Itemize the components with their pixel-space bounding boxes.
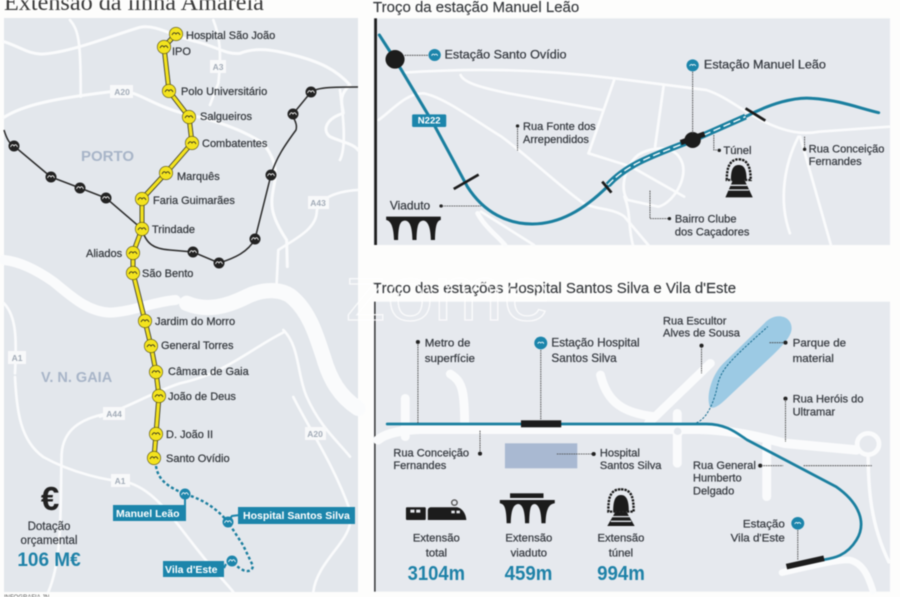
road tags: A20 (114, 87, 130, 97)
stat: viaduct length: viaduto (511, 548, 547, 560)
label: Hospital Santos Silva (557, 447, 662, 472)
label: Rua Conceição Fernandes: Rua Conceição (809, 143, 884, 155)
extension dotted line (156, 466, 253, 571)
label: Estação Vila d'Este (731, 517, 804, 560)
label: Rua Heróis do Ultramar (783, 393, 863, 442)
label: Rua Conceição Fernandes: Fernandes (809, 156, 862, 168)
watermark: zome (345, 249, 550, 337)
station block: Vila d'Este (787, 558, 824, 567)
station block: Hospital Santos Silva (521, 420, 561, 427)
label: Rua Fonte dos Arrependidos (516, 121, 596, 151)
station: Manuel Leão marker: Estação Manuel Leão (704, 58, 826, 72)
label: Rua Heróis do Ultramar: Rua Heróis do (793, 393, 863, 405)
station names: IPO (172, 46, 191, 58)
station names: Polo Universitário (181, 86, 267, 98)
icon: tunnel (607, 489, 635, 526)
icon: tunnel (725, 159, 753, 197)
station names (86, 30, 275, 465)
label: Estação Vila d'Este: Vila d'Este (731, 533, 785, 545)
station names: Faria Guimarães (153, 195, 235, 207)
stat: tunnel length: túnel (609, 548, 633, 560)
road tags: A1 (12, 353, 23, 363)
label: Rua Escultor Alves de Sousa: Rua Escultor (663, 316, 727, 328)
station names: Aliados (86, 248, 123, 260)
label: Rua Escultor Alves de Sousa: Alves de Sousa (663, 328, 741, 340)
label: Rua General Humberto Delgado: Rua General (693, 460, 756, 472)
label: Rua General Humberto Delgado (693, 460, 872, 498)
budget: € (41, 480, 59, 517)
station names: Trindade (152, 224, 195, 236)
building: hospital (505, 443, 577, 468)
label: Hospital Santos Silva (238, 507, 355, 524)
metro line (387, 424, 861, 560)
label: Rua Conceição Fernandes (393, 431, 482, 472)
label: Hospital Santos Silva: Hospital Santos Silva (243, 510, 350, 522)
panel: main map (4, 18, 358, 592)
label: Bairro Clube dos Caçadores (650, 191, 750, 238)
label: Vila d'Este: Vila d'Este (165, 564, 218, 576)
stat: viaduct length: Extensão (505, 532, 552, 544)
stat: tunnel length: 994m (597, 563, 645, 585)
stat: tunnel length (597, 532, 645, 585)
icon: viaduct with train (500, 493, 555, 523)
station: Manuel Leão marker (681, 58, 826, 148)
label: Manuel Leão: Manuel Leão (116, 508, 180, 520)
section ticks (454, 108, 765, 193)
label: Metro de superfície: superfície (425, 353, 475, 365)
station names: Santo Ovídio (166, 453, 230, 465)
panel: Hospital Santos Silva and Vila d'Este section (374, 302, 890, 592)
stat: viaduct length: 459m (505, 563, 552, 585)
station names: Jardim do Morro (155, 316, 235, 328)
label: Manuel Leão (113, 505, 186, 521)
label: Estação Hospital Santos Silva (534, 337, 640, 420)
label: Metro de superfície: Metro de (425, 338, 470, 350)
station names: João de Deus (168, 391, 236, 403)
station names: Marquês (177, 171, 220, 183)
label: Rua Fonte dos Arrependidos: Arrependidos (523, 134, 589, 146)
label: Rua Heróis do Ultramar: Ultramar (793, 406, 835, 418)
label: Rua Fonte dos Arrependidos: Rua Fonte dos (523, 121, 596, 133)
stat: viaduct length (505, 532, 552, 585)
tunnel section (608, 117, 746, 185)
station names: São Bento (142, 268, 193, 280)
station names: Combatentes (202, 138, 268, 150)
icon: train (406, 500, 466, 520)
stat: total length: total (426, 548, 447, 560)
label: Metro de superfície (416, 338, 475, 423)
label: Rua Conceição Fernandes: Fernandes (393, 460, 447, 472)
budget: orçamental (21, 535, 77, 547)
road tags: A1 (115, 476, 126, 486)
station: Santo Ovídio marker: Estação Santo Ovídio (445, 48, 567, 62)
road tags: A3 (213, 62, 224, 72)
label: Estação Vila d'Este: Estação (743, 518, 785, 530)
road sign N222: N222 (418, 116, 441, 127)
station names: D. João II (166, 429, 213, 441)
heading: Hospital Santos Silva and Vila d'Este section: Troço das estações Hospital Santos Silva e Vila d'Este (373, 280, 736, 297)
road tags (8, 60, 329, 487)
label: Parque de material: Parque de (793, 338, 846, 350)
stat: total length (408, 532, 465, 585)
panel: Manuel Leão section (374, 18, 890, 245)
stat: total length: 3104m (408, 563, 465, 585)
label: Rua Conceição Fernandes (803, 137, 884, 168)
label: Hospital Santos Silva: Santos Silva (600, 460, 662, 472)
stat: total length: Extensão (413, 532, 460, 544)
black metro line (4, 86, 358, 268)
road tags: A44 (106, 409, 122, 419)
label: Rua General Humberto Delgado: Humberto (693, 473, 742, 485)
station names: Hospital São João (186, 30, 275, 42)
icon: viaduct (386, 217, 441, 240)
label: Estação Hospital Santos Silva: Estação Hospital (551, 337, 640, 350)
river: Douro (4, 260, 176, 313)
label: Túnel: Túnel (723, 145, 752, 157)
city label: V. N. Gaia: V. N. GAIA (41, 370, 113, 386)
label: Parque de material: material (793, 353, 834, 365)
label: Hospital Santos Silva: Hospital (600, 447, 640, 459)
station names: Câmara de Gaia (168, 366, 250, 378)
road tags: A20 (307, 429, 323, 439)
road tags: A43 (310, 198, 326, 208)
label: Vila d'Este (163, 561, 224, 577)
budget: 106 M€ (17, 550, 81, 571)
yellow metro line (126, 27, 199, 465)
label: Bairro Clube dos Caçadores: Bairro Clube (675, 214, 737, 226)
budget (17, 480, 81, 571)
label: Parque de material (769, 338, 846, 365)
label: Estação Hospital Santos Silva: Santos Silva (551, 352, 617, 365)
label: Rua Conceição Fernandes: Rua Conceição (393, 447, 469, 459)
label: Rua General Humberto Delgado: Delgado (693, 486, 734, 498)
label: Viaduto (390, 198, 481, 212)
depot area (693, 316, 792, 424)
station names: General Torres (161, 340, 234, 352)
station names: Salgueiros (200, 111, 252, 123)
label: Rua Escultor Alves de Sousa (663, 316, 741, 373)
city label: Porto: PORTO (81, 148, 134, 165)
stat: tunnel length: Extensão (598, 532, 644, 544)
station: Santo Ovídio marker (385, 48, 567, 69)
budget: Dotação (28, 521, 70, 533)
metro line (379, 35, 879, 224)
label: Viaduto: Viaduto (390, 198, 431, 212)
road sign N222 (412, 114, 446, 127)
label: Bairro Clube dos Caçadores: dos Caçadores (675, 226, 750, 238)
label: Túnel (714, 135, 752, 157)
